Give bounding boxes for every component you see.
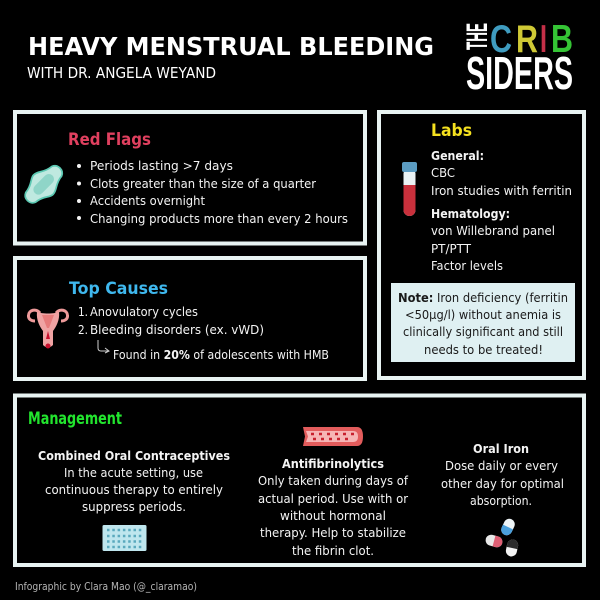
list: labs: Iron studies with ferritin <box>431 183 572 198</box>
column: combined oral contraceptives <box>38 448 230 551</box>
column: antifibrinolytics: Antifibrinolytics <box>282 456 384 471</box>
callout: note: <50μg/l) without anemia is <box>405 307 561 322</box>
logo: The Crib Siders: R <box>516 18 538 61</box>
panel: labs <box>379 112 584 378</box>
list: top causes: Bleeding disorders (ex. vWD) <box>90 322 264 337</box>
arrow: sub-point <box>98 340 109 353</box>
list: top causes <box>78 304 264 337</box>
icon: menstrual pad <box>18 158 70 210</box>
icon: blood vessel <box>303 427 363 446</box>
logo: The Crib Siders: B <box>551 18 573 61</box>
list: red flags <box>77 158 348 226</box>
list: red flags: Clots greater than the size of a quarter <box>90 176 317 191</box>
subtitle: WITH DR. ANGELA WEYAND <box>27 64 216 82</box>
column: antifibrinolytics: Only taken during days of <box>258 473 409 488</box>
logo: The Crib Siders <box>461 18 573 99</box>
list: red flags: Changing products more than every 2 hours <box>90 211 348 226</box>
callout: note: needs to be treated! <box>424 342 543 357</box>
heading: labs: Labs <box>431 121 472 140</box>
column: oral iron: absorption. <box>470 493 532 508</box>
column: antifibrinolytics: the fibrin clot. <box>292 543 374 558</box>
title <box>27 32 434 82</box>
column: oral iron: Dose daily or every <box>445 458 559 473</box>
list: red flags: Periods lasting >7 days <box>90 158 233 173</box>
list: labs: General: <box>431 148 484 163</box>
icon: test tube <box>402 162 417 216</box>
column: antifibrinolytics <box>258 427 409 558</box>
column: antifibrinolytics: without hormonal <box>280 508 386 523</box>
list: labs: PT/PTT <box>431 241 471 256</box>
column: combined oral contraceptives: continuous therapy to entirely <box>45 482 224 497</box>
column: antifibrinolytics: therapy. Help to stabilize <box>260 525 406 540</box>
list: labs: Hematology: <box>431 206 510 221</box>
list: top causes: Anovulatory cycles <box>90 304 198 319</box>
panel: red flags <box>15 112 365 244</box>
icon: pills <box>484 517 519 557</box>
column: oral iron: Oral Iron <box>473 441 529 456</box>
column: combined oral contraceptives: suppress periods. <box>82 499 186 514</box>
title: HEAVY MENSTRUAL BLEEDING <box>28 32 434 61</box>
callout: note: clinically significant and still <box>403 324 563 339</box>
column: oral iron: other day for optimal <box>441 476 564 491</box>
list: labs <box>431 148 572 273</box>
logo: The Crib Siders: I <box>540 18 547 61</box>
icon: uterus <box>28 310 68 348</box>
heading: red flags: Red Flags <box>68 130 151 149</box>
list: red flags: Accidents overnight <box>90 193 205 208</box>
list: top causes: 2. <box>78 322 88 337</box>
heading: top causes: Top Causes <box>69 279 168 298</box>
column: oral iron <box>441 441 564 557</box>
column: antifibrinolytics: actual period. Use with or <box>258 491 409 506</box>
callout: note <box>391 283 575 362</box>
list: labs: CBC <box>431 165 455 180</box>
callout: note: Note: Iron deficiency (ferritin <box>398 290 568 305</box>
list: labs: Factor levels <box>431 258 503 273</box>
list: labs: von Willebrand panel <box>431 223 555 238</box>
column: combined oral contraceptives: Combined Oral Contraceptives <box>38 448 230 463</box>
list: top causes: 1. <box>78 304 88 319</box>
column: combined oral contraceptives: In the acute setting, use <box>64 465 203 480</box>
logo: The Crib Siders: C <box>490 18 512 61</box>
text: adolescent statistic: Found in 20% of adolescents with HMB <box>113 347 329 362</box>
footer credit: Infographic by Clara Mao (@_claramao) <box>15 581 197 593</box>
icon: pill pack <box>102 525 146 551</box>
panel: top causes <box>15 258 365 379</box>
heading: management: Management <box>28 409 122 428</box>
panel: management <box>15 396 584 565</box>
